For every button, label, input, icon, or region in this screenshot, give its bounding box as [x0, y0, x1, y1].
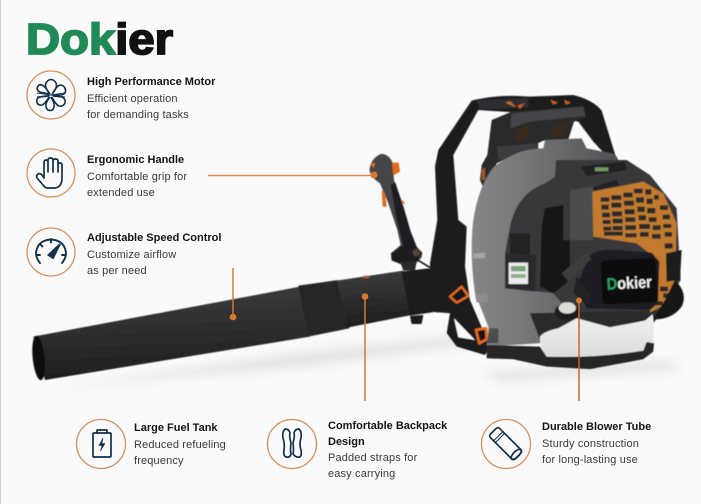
frame base — [487, 342, 654, 369]
icon: blower tube — [482, 420, 530, 468]
text block: high performance motor: High Performance Motor — [87, 76, 215, 88]
callout line: speed control — [230, 268, 236, 320]
logo: Dokier — [26, 15, 173, 64]
fuel tank — [540, 314, 654, 357]
callout line: backpack — [362, 293, 368, 401]
text block: comfortable backpack design: Comfortable Backpack — [328, 420, 447, 432]
text block: ergonomic handle: Ergonomic Handle — [87, 154, 184, 166]
text block: large fuel tank: frequency — [134, 455, 184, 467]
icon: fuel tank — [76, 420, 126, 468]
text block: high performance motor: for demanding tasks — [87, 109, 189, 121]
text block: high performance motor — [87, 76, 216, 121]
logo badge — [601, 258, 658, 305]
blower housing — [472, 138, 630, 347]
text block: adjustable speed control: Customize airflow — [87, 249, 176, 261]
backpack frame and straps — [430, 95, 684, 369]
text block: durable blower tube: for long-lasting use — [542, 454, 638, 466]
callout line: fuel tank — [576, 298, 582, 401]
text block: ergonomic handle: Comfortable grip for — [87, 171, 187, 183]
icon: backpack straps — [268, 420, 316, 468]
text block: adjustable speed control: as per need — [87, 265, 147, 277]
text block: comfortable backpack design: Padded straps for — [328, 452, 417, 464]
handle — [369, 154, 457, 313]
inner carry frame — [480, 106, 586, 192]
text block: ergonomic handle — [87, 154, 187, 199]
engine casing — [505, 160, 681, 313]
text block: comfortable backpack design: Design — [328, 436, 365, 448]
text block: comfortable backpack design — [328, 420, 448, 480]
text block: large fuel tank — [134, 422, 226, 467]
floor shadows — [60, 334, 680, 386]
text block: adjustable speed control — [87, 232, 221, 277]
callout line: ergonomic handle — [208, 172, 378, 178]
product: leaf blower — [30, 95, 684, 386]
text block: adjustable speed control: Adjustable Speed Control — [87, 232, 221, 244]
text block: durable blower tube: Durable Blower Tube — [542, 421, 651, 433]
text block: comfortable backpack design: easy carrying — [328, 468, 395, 480]
text block: large fuel tank: Large Fuel Tank — [134, 422, 218, 434]
text block: durable blower tube: Sturdy construction — [542, 438, 639, 450]
text block: ergonomic handle: extended use — [87, 187, 155, 199]
text block: large fuel tank: Reduced refueling — [134, 439, 226, 451]
icon: motor fan — [27, 71, 75, 119]
logo panel housing — [577, 250, 659, 310]
text block: durable blower tube — [542, 421, 651, 466]
orange engine guard — [592, 182, 677, 313]
blower tube — [30, 268, 447, 381]
icon: speedometer — [27, 228, 75, 276]
icon: hand — [27, 149, 75, 197]
text block: high performance motor: Efficient operation — [87, 93, 178, 105]
logo badge: Dokier — [606, 272, 653, 294]
